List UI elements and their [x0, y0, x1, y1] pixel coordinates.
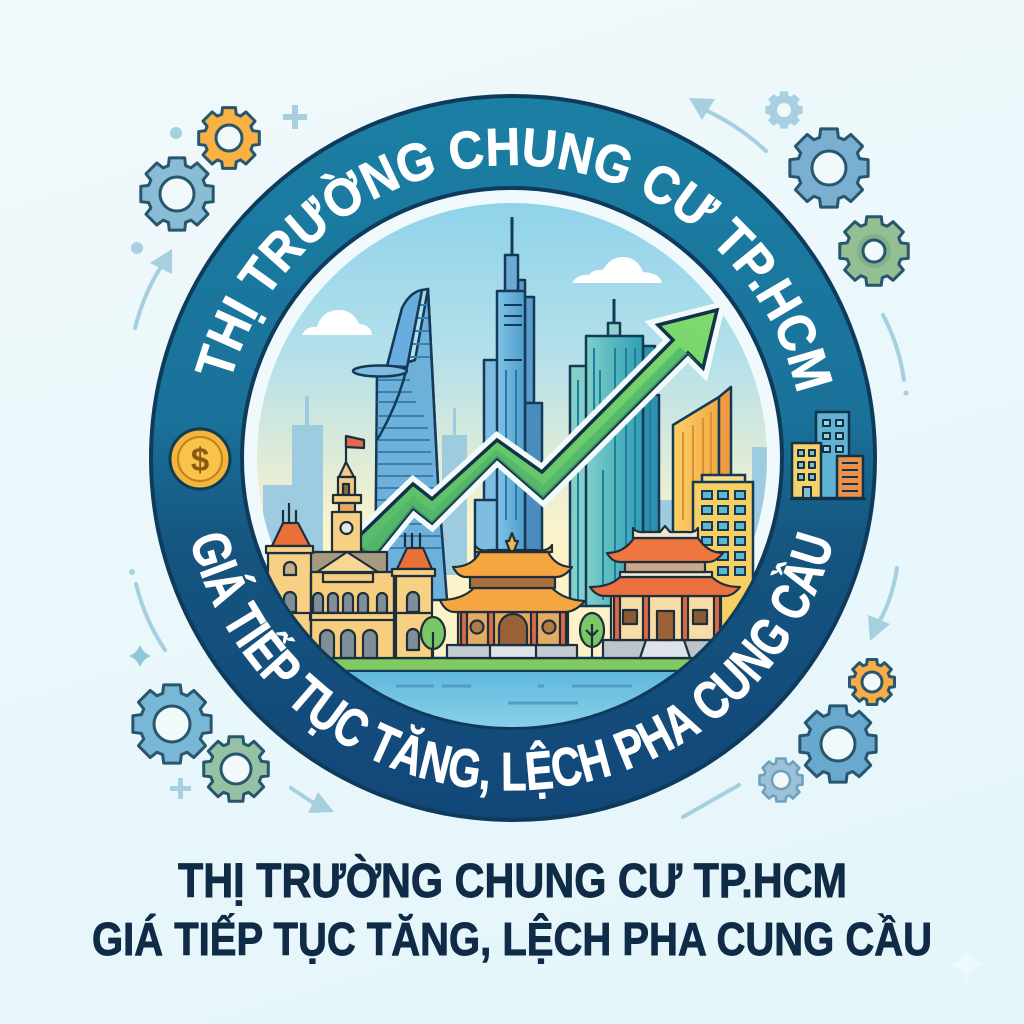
amber tower [673, 387, 731, 540]
arrow: upper-left [135, 249, 172, 328]
curved subtitle: bottom of ring: GIÁ TIẾP TỤC TĂNG, LỆCH PHA CUNG CẦU [192, 532, 832, 800]
tree right [580, 613, 604, 658]
line: bottom-right [683, 785, 739, 817]
Landmark 81 tower [475, 217, 542, 563]
yellow apartment block [693, 475, 753, 632]
Bitexco tower [353, 289, 447, 600]
dots and plus marks [129, 105, 984, 982]
gear: pale small bottom-right [759, 758, 803, 802]
badge ring [151, 96, 875, 820]
arc: lower-left [129, 569, 165, 650]
foreground scene [264, 217, 754, 727]
gear: orange bottom-right [850, 660, 894, 704]
arc: right [883, 315, 908, 396]
decorative gears and arrows [129, 91, 984, 982]
gear: blue top-right [790, 129, 868, 207]
teal tower [570, 299, 659, 606]
gear: pale small top-right [765, 91, 803, 129]
distant buildings [263, 396, 767, 575]
arrow: lower-right [868, 568, 897, 641]
curved title: top of ring: THỊ TRƯỜNG CHUNG CƯ TP.HCM [194, 128, 833, 392]
caption [92, 853, 932, 965]
caption line 1: THỊ TRƯỜNG CHUNG CƯ TP.HCM [178, 853, 847, 908]
right temple [590, 526, 740, 658]
green rising arrow [350, 310, 717, 555]
arrow: upper-right [689, 98, 766, 151]
scene: skyline in circle [240, 188, 785, 742]
icon: dollar coin [170, 429, 230, 489]
gear: orange top-left [199, 108, 259, 168]
sky [257, 203, 767, 657]
tree left [421, 617, 445, 658]
arrow: bottom-left [291, 788, 334, 813]
sky and background layer [257, 203, 767, 657]
central temple [440, 533, 585, 658]
gear: blue bottom-right [800, 706, 876, 782]
city hall [266, 436, 435, 658]
river [349, 672, 675, 727]
gear: green right [840, 217, 908, 285]
gear: blue bottom-left [133, 685, 211, 763]
gear: green bottom-left [204, 737, 268, 801]
icon: small buildings [790, 412, 866, 499]
cloud right [572, 257, 662, 283]
icon: dollar coin: $ [191, 441, 209, 478]
white inner border [242, 188, 782, 728]
ground strip [332, 656, 692, 672]
cloud left [302, 310, 372, 335]
gear: blue left [141, 158, 213, 230]
